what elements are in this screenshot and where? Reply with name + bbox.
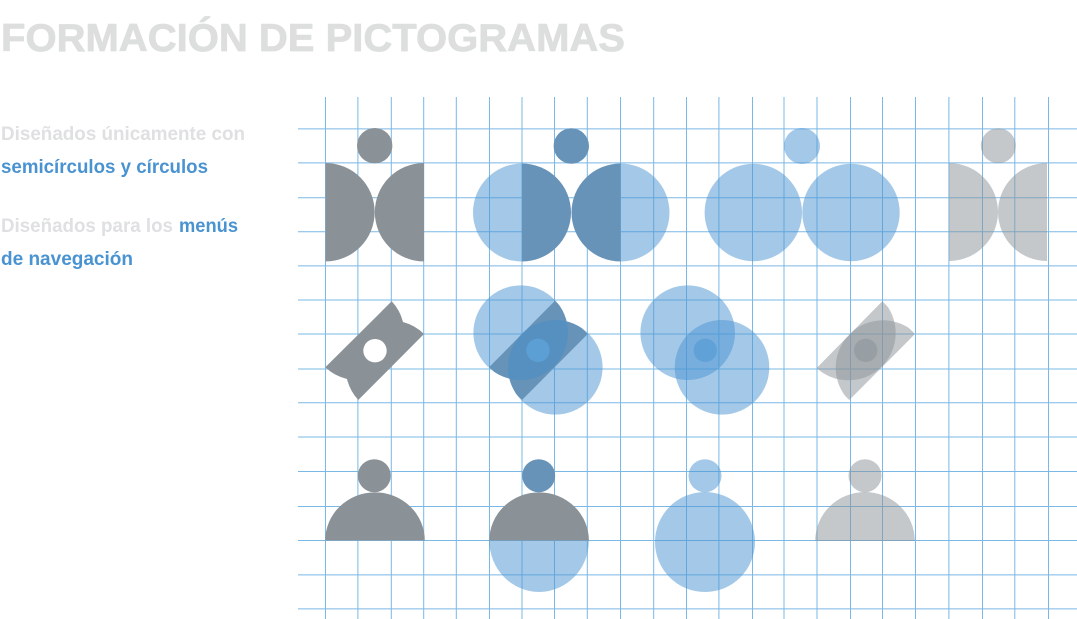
icon: figure row 1, circles [705, 128, 900, 261]
text line: semicircles and circles: Diseñados únicamente con [1, 123, 245, 145]
text line: semicircles and circles [1, 123, 245, 178]
text line: navigation menus: Diseñados para los [1, 215, 173, 237]
icon: ticket row 2, construction [473, 285, 603, 415]
icon: bell row 3, construction [489, 459, 589, 592]
icon: bell row 3, solid [325, 459, 425, 540]
icon: figure row 1, ghost [949, 128, 1047, 261]
icon: ticket row 2, ghost [817, 301, 915, 400]
text line: navigation menus [1, 215, 238, 270]
title: FORMACIÓN DE PICTOGRAMAS [1, 16, 625, 60]
icon: ticket row 2, solid [325, 301, 424, 400]
icon: bell row 3, ghost [815, 459, 915, 541]
icon: figure row 1, construction [473, 128, 670, 262]
text line: navigation menus: de navegación [1, 248, 133, 270]
icon: bell row 3, circles [655, 459, 755, 592]
icon: ticket row 2, circles [640, 285, 769, 415]
icon: figure row 1, solid [326, 128, 424, 261]
text line: semicircles and circles: semicírculos y círculos [1, 156, 208, 178]
text block: description [1, 123, 245, 270]
text line: navigation menus: menús [179, 215, 238, 237]
